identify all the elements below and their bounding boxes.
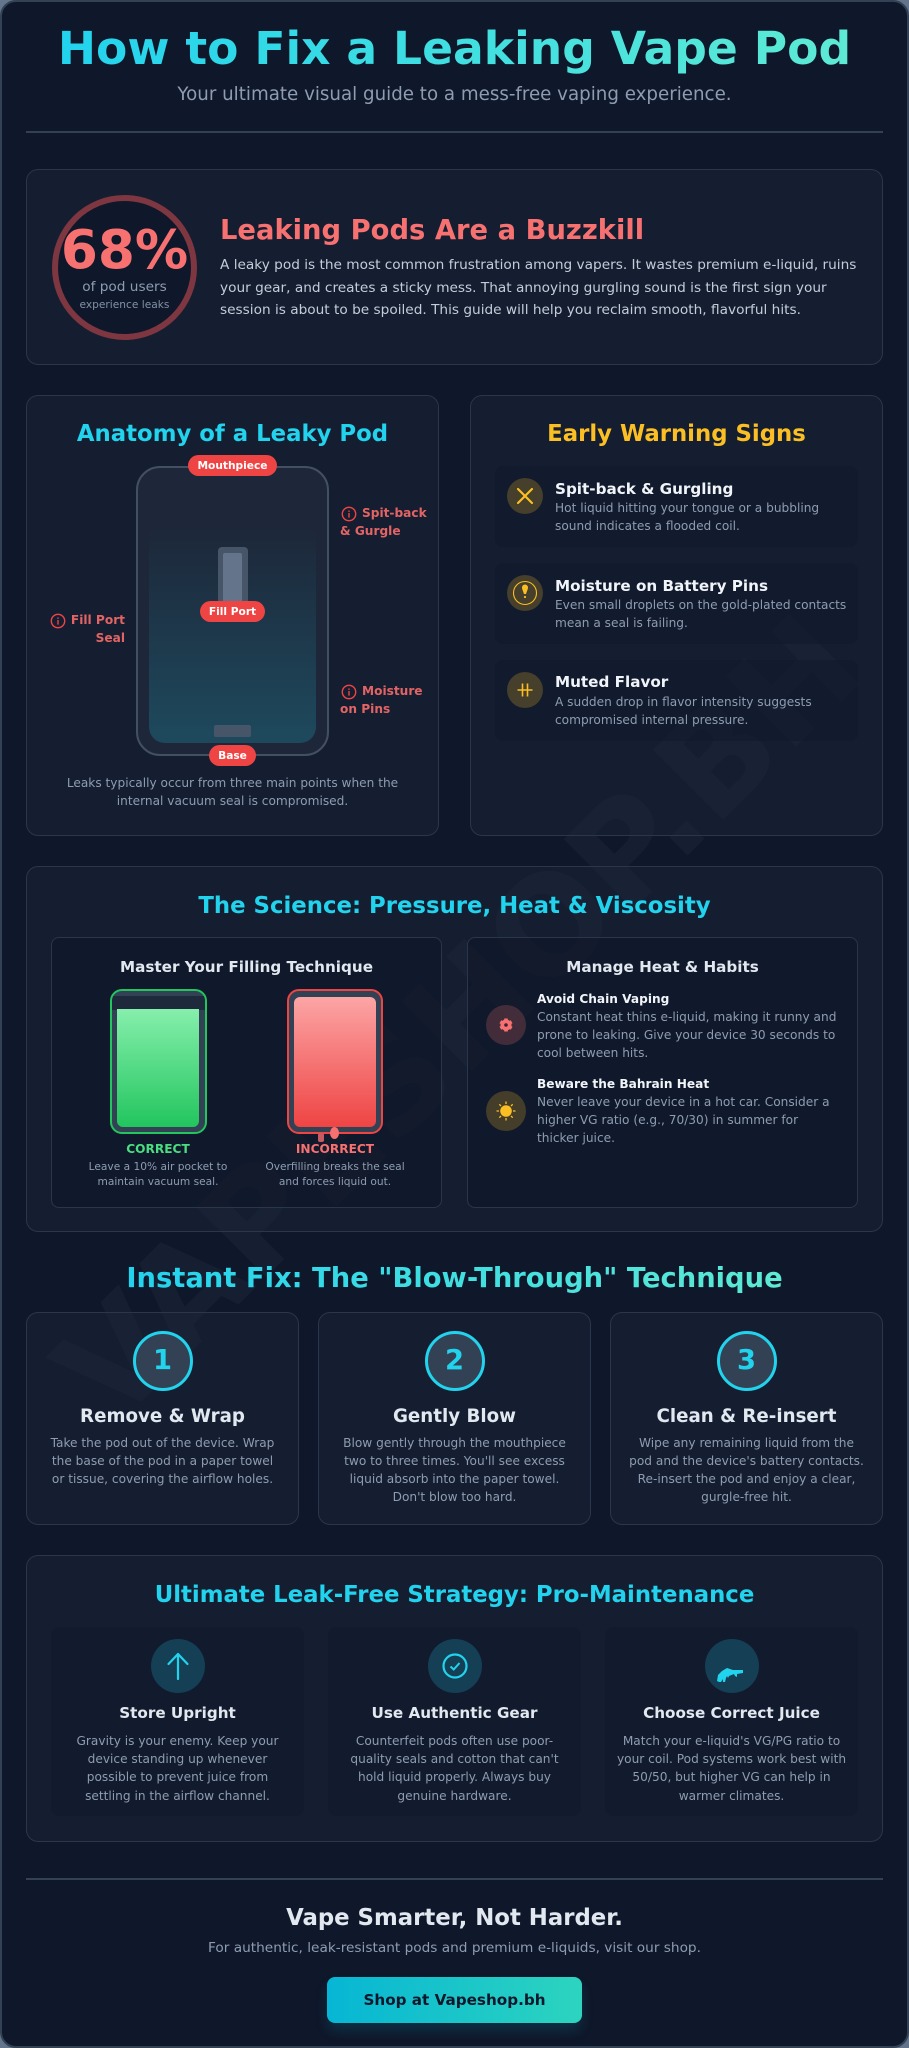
- pod base block: [214, 725, 251, 737]
- subtitle: Your ultimate visual guide to a mess-free vaping experience.: [177, 84, 732, 105]
- warning item: muted flavor: [495, 660, 858, 741]
- incorrect description: [265, 1160, 405, 1188]
- icon: sun: [486, 1091, 526, 1131]
- intro text: [220, 257, 856, 318]
- warning description: A sudden drop in flavor intensity suggests: [555, 695, 812, 709]
- callout: spit-back and gurgle: Spit-back: [362, 506, 427, 520]
- tip text: [77, 1734, 278, 1803]
- science heading: The Science: Pressure, Heat & Viscosity: [198, 893, 711, 919]
- callout: spit-back and gurgle: & Gurgle: [340, 524, 401, 538]
- label: base: Base: [218, 749, 247, 762]
- tip: chain vaping: Constant heat thins e-liquid, making it runny and: [537, 1010, 836, 1024]
- warning description: Even small droplets on the gold-plated contacts: [555, 598, 846, 612]
- icon: gear: [486, 1005, 526, 1045]
- correct liquid: [117, 1009, 199, 1127]
- incorrect label: INCORRECT: [296, 1142, 374, 1156]
- pod tube: [218, 547, 248, 609]
- label: mouthpiece: Mouthpiece: [197, 459, 268, 472]
- tip: chain vaping: [537, 992, 836, 1060]
- step text: [343, 1436, 566, 1504]
- step text: [629, 1436, 864, 1504]
- heat heading: Manage Heat & Habits: [566, 958, 759, 976]
- header divider: [26, 131, 883, 133]
- warning item: moisture: [495, 563, 858, 644]
- panel: the science: [26, 866, 883, 1232]
- tip text: Gravity is your enemy. Keep your: [77, 1734, 278, 1748]
- warning description: [555, 695, 812, 727]
- callout: fill port seal: Fill Port: [71, 613, 125, 627]
- label: fill port: [200, 601, 265, 622]
- tip text: Counterfeit pods often use poor-: [356, 1734, 553, 1748]
- tip text: [350, 1734, 559, 1803]
- step number: 3: [737, 1345, 756, 1376]
- step number: [424, 1331, 484, 1391]
- correct label: CORRECT: [126, 1142, 190, 1156]
- tip card: correct juice: [605, 1627, 858, 1816]
- tip text: settling in the airflow channel.: [85, 1789, 270, 1803]
- intro text: your gear, and creates a sticky mess. That annoying gurgling sound is the first sign your: [220, 280, 827, 296]
- label: mouthpiece: [188, 455, 277, 476]
- callout: fill port seal: [50, 613, 125, 645]
- filling heading: Master Your Filling Technique: [120, 958, 373, 976]
- step card 2: [318, 1312, 591, 1525]
- step text: the base of the pod in a paper towel: [52, 1454, 273, 1468]
- incorrect description: and forces liquid out.: [279, 1175, 391, 1188]
- step title: Gently Blow: [393, 1406, 516, 1427]
- instant fix heading: Instant Fix: The "Blow-Through" Technique: [126, 1263, 783, 1294]
- step card 1: [26, 1312, 299, 1525]
- tip: bahrain heat: Beware the Bahrain Heat: [537, 1076, 709, 1090]
- incorrect liquid: [294, 997, 376, 1127]
- callout: moisture on pins: [340, 684, 423, 716]
- stat sub caption: experience leaks: [80, 298, 169, 311]
- sub-panel: heat and habits: [467, 937, 858, 1208]
- icon: alert circle: [507, 575, 543, 611]
- icon: cross: [507, 478, 543, 514]
- tip: bahrain heat: higher VG ratio (e.g., 70/30) in summer for: [537, 1113, 798, 1127]
- panel: anatomy of a leaky pod: [26, 395, 439, 836]
- tip: bahrain heat: Never leave your device in a hot car. Consider a: [537, 1095, 830, 1109]
- correct description: maintain vacuum seal.: [97, 1175, 219, 1188]
- warning description: sound indicates a flooded coil.: [555, 519, 740, 533]
- call to action button: Shop at Vapeshop.bh: [363, 1991, 546, 2009]
- tip: bahrain heat: [537, 1076, 830, 1145]
- tip text: hold liquid properly. Always buy: [358, 1770, 551, 1784]
- footer text: For authentic, leak-resistant pods and premium e-liquids, visit our shop.: [208, 1940, 701, 1956]
- pod liquid: [149, 527, 316, 743]
- pod inner tube: [223, 553, 242, 609]
- incorrect pod: [287, 989, 383, 1134]
- icon: up arrow: [150, 1639, 204, 1693]
- stat caption: of pod users: [82, 279, 167, 295]
- tip text: your coil. Pod systems work best with: [617, 1752, 846, 1766]
- anatomy caption: internal vacuum seal is compromised.: [117, 794, 348, 808]
- footer heading: Vape Smarter, Not Harder.: [286, 1905, 623, 1931]
- tip text: quality seals and cotton that can't: [350, 1752, 559, 1766]
- step text: Re-insert the pod and enjoy a clear,: [638, 1472, 855, 1486]
- step title: Clean & Re-insert: [656, 1406, 837, 1427]
- footer divider: [26, 1878, 883, 1880]
- intro heading: Leaking Pods Are a Buzzkill: [220, 215, 644, 246]
- drop: [330, 1127, 339, 1139]
- tip text: possible to prevent juice from: [87, 1770, 268, 1784]
- warning description: [555, 501, 819, 533]
- step title: Remove & Wrap: [80, 1406, 245, 1427]
- warning heading text: Moisture on Battery Pins: [555, 576, 768, 594]
- icon: juice drip: [704, 1639, 758, 1693]
- step number: [132, 1331, 192, 1391]
- tip card: authentic gear: [328, 1627, 581, 1816]
- step number: 1: [153, 1345, 172, 1376]
- step text: Wipe any remaining liquid from the: [639, 1436, 854, 1450]
- callout: fill port seal: Seal: [96, 631, 125, 645]
- sub-panel: filling technique: [51, 937, 442, 1208]
- intro text: session is about to be spoiled. This guide will help you reclaim smooth, flavorful hits.: [220, 302, 801, 318]
- panel: leaking pods intro: [26, 169, 883, 365]
- panel: early warning signs: [470, 395, 883, 836]
- air pocket: [112, 996, 205, 1010]
- callout: moisture on pins: on Pins: [340, 702, 390, 716]
- step text: pod and the device's battery contacts.: [629, 1454, 864, 1468]
- correct pod: [110, 989, 207, 1134]
- watermark: VAPESHOP.BH: [27, 587, 891, 1451]
- tip text: genuine hardware.: [397, 1789, 512, 1803]
- step number: 2: [445, 1345, 464, 1376]
- tip text: device standing up whenever: [88, 1752, 267, 1766]
- icon: muted: [507, 672, 543, 708]
- tip text: [617, 1734, 846, 1803]
- warning heading text: Muted Flavor: [555, 673, 668, 691]
- step text: gurgle-free hit.: [701, 1490, 792, 1504]
- warning description: Hot liquid hitting your tongue or a bubbling: [555, 501, 819, 515]
- label: fill port: Fill Port: [209, 605, 256, 618]
- step text: Don't blow too hard.: [393, 1490, 516, 1504]
- warning description: compromised internal pressure.: [555, 713, 748, 727]
- tip text: warmer climates.: [679, 1789, 784, 1803]
- anatomy caption: Leaks typically occur from three main points when the: [67, 776, 398, 790]
- tip title: Use Authentic Gear: [372, 1704, 537, 1722]
- tip: chain vaping: prone to leaking. Give your device 30 seconds to: [537, 1028, 835, 1042]
- tip text: Match your e-liquid's VG/PG ratio to: [623, 1734, 840, 1748]
- anatomy heading: Anatomy of a Leaky Pod: [77, 421, 388, 447]
- title: How to Fix a Leaking Vape Pod: [58, 22, 851, 75]
- intro text: A leaky pod is the most common frustration among vapers. It wastes premium e-liquid, ruins: [220, 257, 856, 273]
- warning item: spit-back: [495, 466, 858, 547]
- step number: [716, 1331, 776, 1391]
- tip card: store upright: [51, 1627, 304, 1816]
- correct description: [89, 1160, 227, 1188]
- tip text: 50/50, but higher VG can help in: [632, 1770, 831, 1784]
- warning description: [555, 598, 846, 630]
- maintenance heading: Ultimate Leak-Free Strategy: Pro-Maintenance: [155, 1582, 754, 1608]
- anatomy caption: [67, 776, 398, 808]
- correct description: Leave a 10% air pocket to: [89, 1160, 227, 1173]
- callout: moisture on pins: Moisture: [362, 684, 423, 698]
- tip title: Choose Correct Juice: [643, 1704, 820, 1722]
- step card 3: [610, 1312, 883, 1525]
- warning description: mean a seal is failing.: [555, 616, 688, 630]
- step text: Blow gently through the mouthpiece: [343, 1436, 566, 1450]
- stat circle: 68%: [52, 195, 197, 340]
- step text: two to three times. You'll see excess: [344, 1454, 565, 1468]
- tip title: Store Upright: [119, 1704, 236, 1722]
- label: base: [209, 745, 256, 766]
- call to action button: [327, 1977, 582, 2023]
- step text: Take the pod out of the device. Wrap: [51, 1436, 274, 1450]
- step text: or tissue, covering the airflow holes.: [52, 1472, 273, 1486]
- tip: chain vaping: Avoid Chain Vaping: [537, 992, 669, 1006]
- step text: liquid absorb into the paper towel.: [350, 1472, 559, 1486]
- panel: pro-maintenance: [26, 1555, 883, 1842]
- incorrect description: Overfilling breaks the seal: [265, 1160, 405, 1173]
- drip: [318, 1133, 324, 1142]
- stat number: 68%: [61, 219, 188, 281]
- icon: check circle: [428, 1639, 482, 1693]
- step text: [50, 1436, 274, 1486]
- warning heading: Early Warning Signs: [547, 421, 806, 447]
- pod diagram: [136, 466, 329, 756]
- warning heading text: Spit-back & Gurgling: [555, 480, 733, 498]
- callout: spit-back and gurgle: [340, 506, 427, 538]
- tip: chain vaping: cool between hits.: [537, 1046, 648, 1060]
- tip: bahrain heat: thicker juice.: [537, 1131, 615, 1145]
